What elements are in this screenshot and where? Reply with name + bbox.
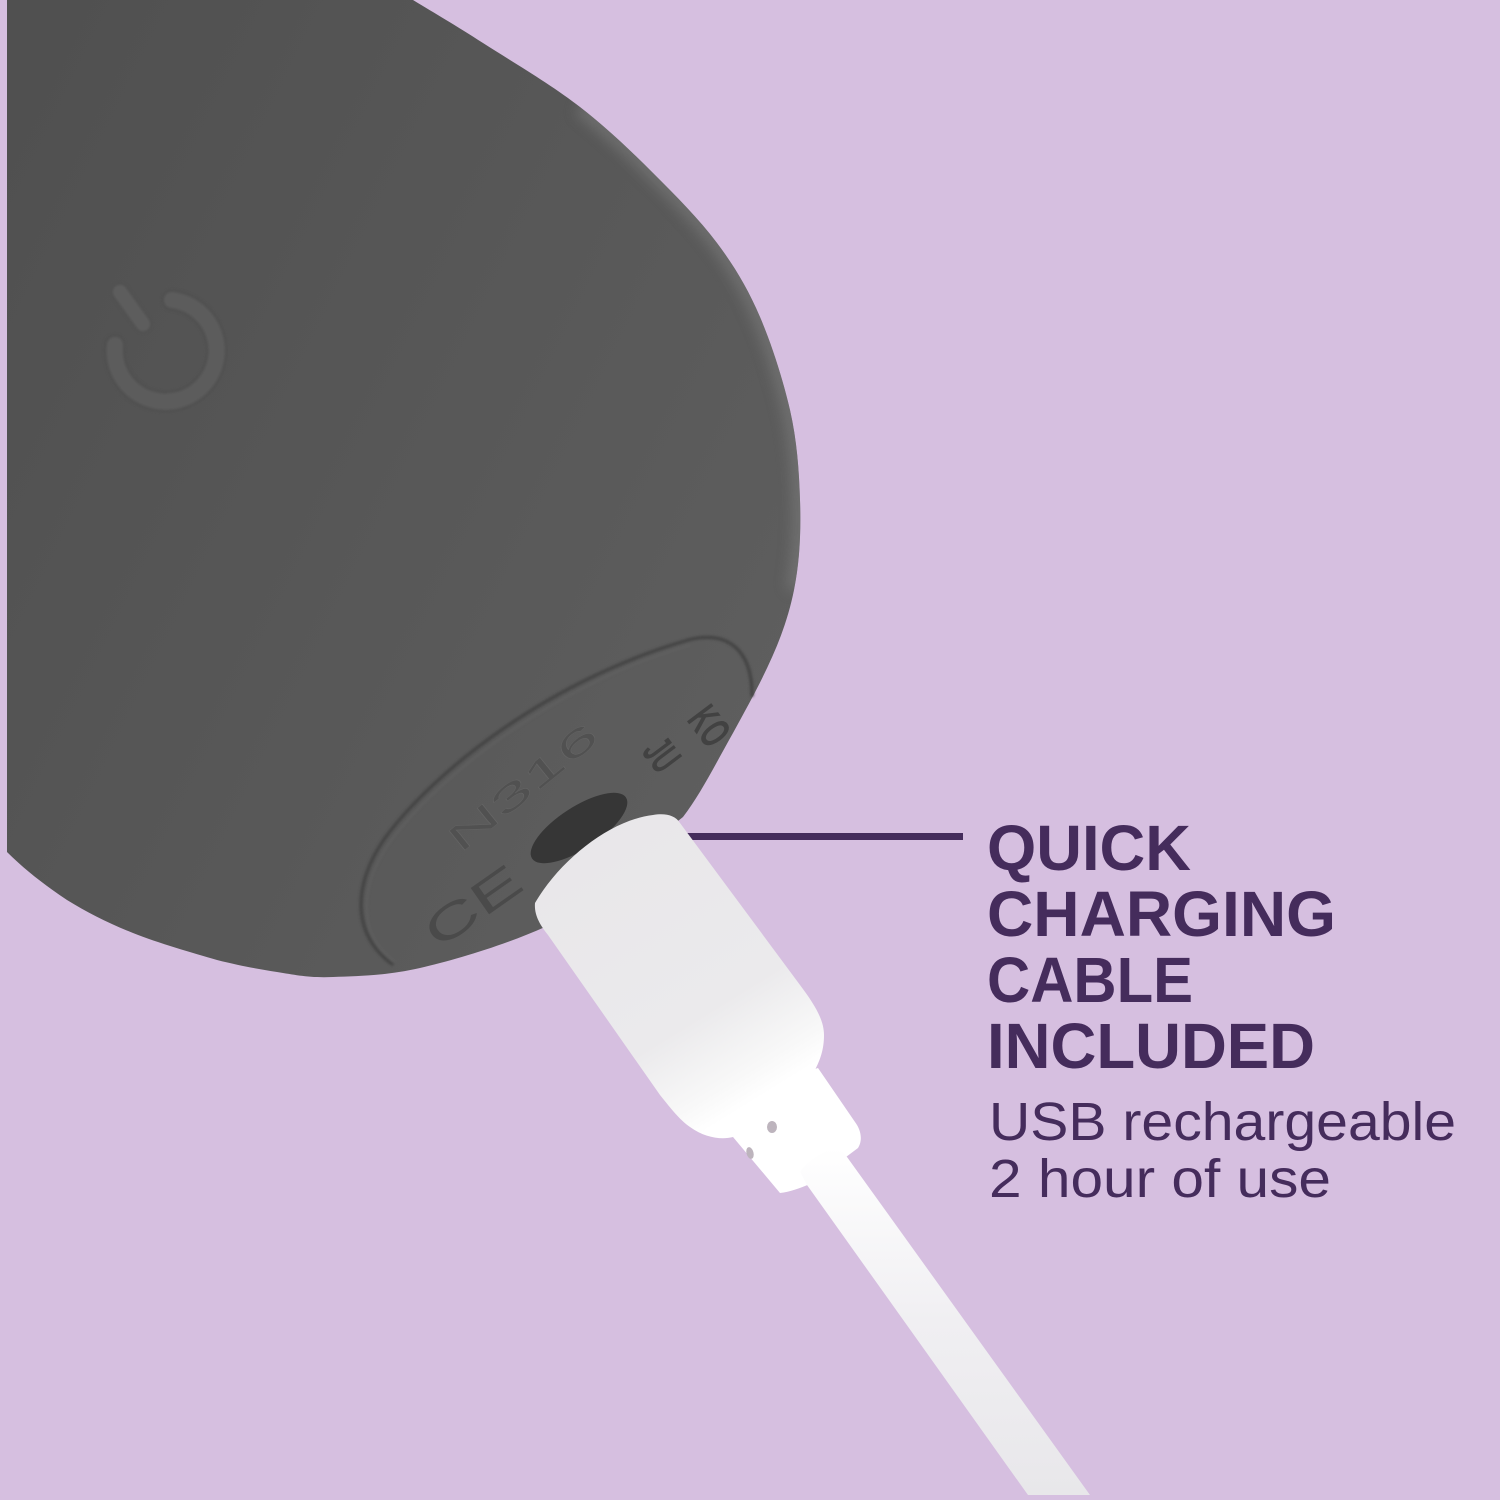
heading: CABLE xyxy=(987,944,1193,1016)
callout text xyxy=(987,812,1456,1209)
body rim highlight xyxy=(580,107,800,590)
subheading xyxy=(989,1092,1456,1209)
heading: QUICK xyxy=(987,812,1191,884)
plug vent hole upper xyxy=(767,1121,777,1133)
leader line xyxy=(680,833,963,840)
subheading: USB rechargeable xyxy=(989,1092,1456,1152)
plug vent hole lower xyxy=(745,1146,755,1160)
embossed model text: N316 xyxy=(439,714,606,860)
heading: CHARGING xyxy=(987,878,1336,950)
plug neck xyxy=(733,1068,861,1193)
device body xyxy=(7,0,800,977)
charging cable xyxy=(535,814,1090,1495)
heading: INCLUDED xyxy=(987,1010,1315,1082)
plug housing xyxy=(535,814,824,1138)
subheading: 2 hour of use xyxy=(989,1149,1331,1209)
embossed CE mark: CE xyxy=(414,854,532,958)
power icon bar shadow xyxy=(120,292,143,324)
embossed logo letters: JU xyxy=(633,729,690,782)
body silhouette xyxy=(7,0,800,977)
end cap groove xyxy=(361,637,752,964)
end cap highlight xyxy=(367,645,690,962)
heading xyxy=(987,812,1336,1082)
embossed logo letters second part: KO xyxy=(678,696,741,756)
cable wire xyxy=(800,1147,1090,1495)
icon: power button xyxy=(115,292,217,402)
power icon bar xyxy=(120,292,143,324)
power icon shadow xyxy=(115,300,217,402)
power icon ring xyxy=(115,300,217,402)
charging port xyxy=(521,780,637,876)
